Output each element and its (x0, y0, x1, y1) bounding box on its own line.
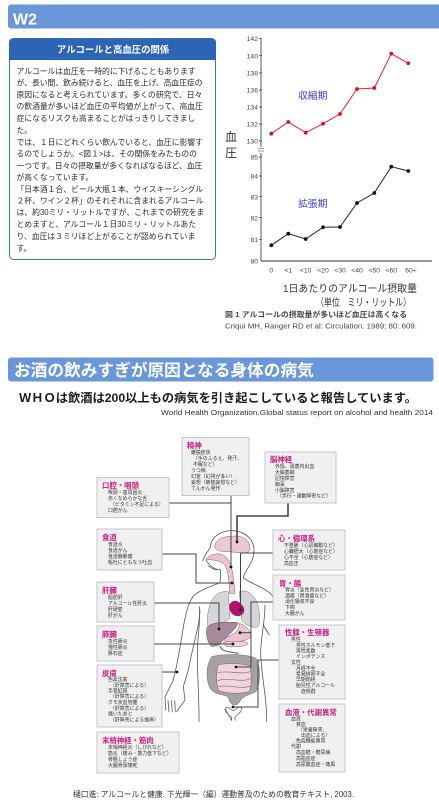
box: cranial nerves: 外傷、頭蓋内出血 (275, 463, 314, 470)
x axis labels: <20 (317, 268, 329, 274)
box: stomach and intestines: 消化吸収不良 (285, 598, 314, 605)
box: esophagus: 食道 (102, 533, 117, 542)
box: oral cavity and pharynx: 喉頭・歯周囲炎 (108, 489, 142, 496)
box: mental (182, 438, 249, 496)
box: esophagus (97, 529, 162, 570)
box: mental: 離脱症状 (191, 449, 211, 456)
box: mental: うつ病 (191, 468, 206, 474)
box: pancreas: 膵石症 (108, 650, 123, 657)
liver (206, 622, 238, 647)
box: pancreas: 急性膵炎 (108, 638, 128, 645)
series: diastolic (black) (269, 165, 410, 247)
box: peripheral nerves and muscle: 大腿骨頭壊死 (108, 762, 137, 769)
box: oral cavity and pharynx (97, 478, 169, 518)
box: mental: 不眠など） (193, 461, 217, 468)
x axis title: （単位 ミリ・リットル） (316, 296, 411, 309)
x axis labels: <40 (351, 268, 363, 274)
panel body text: 一つです。日々の摂取量が多くなればなるほど、血圧 (16, 161, 203, 171)
box: heart and circulation: 不整脈（心房細動など） (284, 542, 338, 549)
box: oral cavity and pharynx: 赤くなめらかな舌 (108, 495, 147, 502)
box: liver: 肝硬変 (108, 606, 123, 613)
box: skin: 掻いたあと (108, 710, 133, 718)
box: oral cavity and pharynx: 口腔・咽頭 (102, 481, 140, 490)
box: mental: 精神 (187, 441, 202, 450)
box: mental: 幻覚（幻視が多い） (191, 473, 235, 480)
x axis title (283, 282, 417, 309)
panel: alcohol and hypertension (9, 38, 216, 260)
panel body text: す。 (16, 244, 31, 253)
box: cranial nerves: 記憶障害 (275, 475, 295, 482)
box: pancreas (97, 626, 154, 661)
box: blood and metabolic disorders (279, 704, 345, 772)
box: oral cavity and pharynx: （ビタミン不足による） (110, 501, 164, 508)
box: blood and metabolic disorders: 血液・代謝異常 (285, 708, 337, 717)
box: blood and metabolic disorders: 血液 (291, 716, 301, 722)
box: oral cavity and pharynx: 口腔がん (108, 507, 128, 514)
box: reproductive organs: 症候群 (301, 688, 316, 695)
box: peripheral nerves and muscle (97, 732, 179, 773)
box: stomach and intestines: 下痢 (285, 605, 295, 611)
panel body text: は、約30ミリ・リットルですが、これまでの研究をま (16, 207, 204, 217)
box: blood and metabolic disorders: 貧血 (296, 721, 306, 728)
x axis labels: 60+ (405, 268, 417, 274)
heading bar: W2 (8, 4, 439, 28)
box: stomach and intestines: 胃・腸 (279, 579, 302, 588)
box: liver (97, 582, 154, 622)
box: peripheral nerves and muscle: 末梢神経・筋肉 (102, 736, 154, 745)
box: heart and circulation: 高血圧 (284, 560, 299, 567)
box: cranial nerves: 小脳障害 (275, 487, 295, 494)
box: stomach and intestines: 大腸がん (285, 610, 305, 617)
small intestine (217, 664, 251, 693)
box: cranial nerves (265, 452, 336, 503)
box: reproductive organs (279, 625, 345, 699)
y axis labels: 130 (247, 139, 258, 146)
heart (230, 601, 244, 616)
WHO statement: ＷＨＯは飲酒は200以上もの病気を引き起こしていると報告しています。 (19, 390, 417, 405)
x axis labels (269, 268, 417, 274)
box: skin: 色素沈着 (108, 676, 128, 683)
box: blood and metabolic disorders: 高尿酸血症・痛風 (296, 761, 335, 768)
y axis labels: 136 (247, 88, 258, 95)
panel body text: た。 (16, 126, 32, 135)
figure caption: Criqui MH, Ranger RD et al: Circulation. 1989; 80: 609. (225, 322, 417, 330)
y axis labels: 82 (250, 215, 258, 222)
box: pancreas: 膵臓 (102, 630, 117, 639)
body diagram (97, 438, 345, 773)
box: reproductive organs: 男性ホルモン低下 (296, 642, 335, 649)
box: liver: 脂肪肝 (108, 594, 123, 601)
box: esophagus: 嘔吐にともなう吐血 (108, 559, 152, 566)
x axis labels: <30 (334, 268, 346, 274)
y axis labels: 132 (247, 122, 258, 129)
panel body text: が、長い間、飲み続けると、血圧を上げ、高血圧症の (16, 78, 203, 88)
box: reproductive organs: 男性素数 (296, 648, 316, 654)
box: skin: （肝障害による） (110, 682, 149, 689)
box: reproductive organs: 性腺・生殖器 (285, 628, 330, 637)
box: esophagus: 食道炎 (108, 541, 123, 548)
box: blood and metabolic disorders: 免疫機能異常 (296, 738, 325, 744)
box: skin (97, 665, 162, 727)
y axis title (225, 130, 237, 160)
series: systolic (red) (269, 52, 410, 136)
panel body text: ２杯、ワイン２杯」のそれぞれに含まれるアルコール (16, 196, 204, 206)
box: esophagus: 食道静脈瘤 (108, 553, 133, 560)
panel body text (16, 66, 204, 253)
box: peripheral nerves and muscle: 骨粗しょう症 (108, 756, 137, 763)
body outline (165, 531, 274, 722)
box: liver: 肝がん (108, 612, 123, 619)
y axis labels: 142 (247, 36, 258, 43)
heading bar: W2: W2 (13, 12, 37, 28)
panel body text: るのでしょうか。<図１>は、その関係をみたものの (16, 149, 197, 159)
box: reproductive organs: 早期閉経 (296, 676, 316, 683)
y axis labels: 83 (250, 194, 258, 201)
y axis labels: 138 (247, 71, 258, 78)
connector lines (154, 495, 288, 707)
large intestine (207, 655, 259, 705)
panel body text: では、１日にどれくらい飲んでいると、血圧に影響す (16, 137, 203, 147)
panel header (9, 38, 216, 60)
box: mental: （手のふるえ、発汗、 (193, 455, 242, 462)
x axis labels: <60 (386, 268, 397, 274)
y axis labels: 81 (250, 237, 258, 244)
panel body text: り、血圧は３ミリほど上がることが認められていま (16, 231, 195, 241)
box: blood and metabolic disorders: 高脂血症 (296, 755, 316, 762)
panel body text: 症になるリスクも高まることがはっきりしてきまし (16, 113, 195, 123)
box: skin: （肝障害による掻痒） (110, 716, 159, 724)
box: heart and circulation: 心・循環系 (278, 534, 316, 543)
panel header: アルコールと高血圧の関係 (57, 44, 170, 55)
y axis title: 圧 (225, 146, 237, 160)
x axis labels: <50 (369, 268, 380, 274)
human body illustration (165, 531, 274, 722)
lungs (207, 591, 260, 630)
box: cranial nerves: 痴呆 (275, 481, 285, 488)
panel body text: 「日本酒１合、ビール大瓶１本、ウイスキーシングル (16, 184, 203, 194)
chart: blood pressure vs alcohol intake (225, 36, 432, 309)
stomach and pancreas (224, 623, 251, 642)
chart axes (258, 38, 432, 261)
box: heart and circulation (273, 530, 345, 570)
box: stomach and intestines: 胃炎（急性胃炎など） (285, 586, 334, 594)
connector dots (176, 541, 242, 708)
box: heart and circulation: 心臓肥大（心筋症など） (284, 548, 338, 555)
figure caption (225, 310, 417, 330)
box: skin: クモ状血管腫 (108, 699, 137, 706)
box: peripheral nerves and muscle: 末梢神経炎（しびれなど） (108, 744, 167, 751)
figure caption: 図 1 アルコールの摂取量が多いほど血圧は高くなる (225, 310, 407, 319)
box: mental: 妄想（嫉妬妄想など） (191, 479, 240, 486)
WHO source: World Health Organization.Global status report on alcohol and health 2014 (161, 408, 433, 417)
y axis title: 血 (225, 130, 237, 144)
panel body text: 原因になると考えられています。多くの研究で、日々 (16, 89, 202, 99)
y axis labels: 140 (247, 53, 258, 60)
box: liver: アルコール性肝炎 (108, 600, 147, 607)
heading bar: diseases caused by excess drinking: お酒の飲みすぎが原因となる身体の病気 (14, 360, 314, 380)
box: esophagus: 食道がん (108, 547, 128, 554)
heading bar: diseases caused by excess drinking (8, 358, 434, 382)
box: pancreas: 慢性膵炎 (108, 644, 128, 651)
panel body text: の飲酒量が多いほど血圧の平均値が上がって、高血圧 (16, 101, 203, 111)
box: heart and circulation: 心不全（心筋症など） (284, 554, 333, 561)
box: reproductive organs: 女性 (291, 659, 301, 666)
x axis labels: 0 (269, 268, 273, 274)
source citation: 樋口進: アルコールと健康. 下光輝一（編）運動普及のための教育テキスト, 2003. (73, 789, 354, 799)
x axis labels: <10 (300, 268, 312, 274)
box: liver: 肝臓 (102, 586, 117, 595)
panel body text: とめますと、アルコール１日30ミリ・リットルあた (16, 220, 196, 229)
y axis labels: 85 (250, 155, 258, 162)
x axis title: 1日あたりのアルコール摂取量 (283, 282, 417, 295)
box: blood and metabolic disorders: 代謝 (291, 743, 301, 750)
panel body text: アルコールは血圧を一時的に下げることもあります (16, 66, 196, 76)
box: blood and metabolic disorders: 高血糖・糖尿病 (296, 749, 330, 756)
box: cranial nerves: （歩行・運動障害など） (277, 492, 331, 500)
box: reproductive organs: 男性 (291, 636, 301, 643)
box: peripheral nerves and muscle: 筋炎（痛み・筋力低下など） (108, 750, 172, 757)
y axis labels (247, 36, 258, 265)
box: stomach and intestines: 潰瘍（胃潰瘍など） (285, 592, 329, 600)
box: mental: てんかん発作 (191, 485, 220, 492)
mouth and throat (206, 554, 235, 593)
y axis labels: 84 (250, 174, 258, 181)
box: cranial nerves: 大脳萎縮 (275, 469, 295, 476)
box: skin: （肝障害による） (110, 705, 149, 712)
panel body text: が高くなっています。 (16, 172, 93, 182)
box: skin: （肝障害による） (110, 693, 149, 700)
box: reproductive organs: 希発排卵不全 (296, 670, 325, 678)
box: reproductive organs: 胎児性アルコール (296, 682, 335, 689)
box: stomach and intestines (273, 575, 345, 620)
box: blood and metabolic disorders: 出血による） (301, 732, 330, 739)
box: skin: 手掌紅斑 (108, 688, 128, 694)
box: cranial nerves: 脳神経 (270, 455, 293, 464)
box: reproductive organs: 月経不全 (296, 665, 316, 672)
box: blood and metabolic disorders: （栄養障害、 (298, 726, 327, 734)
label: diastolic: 拡張期 (298, 197, 328, 210)
x axis labels: <1 (284, 268, 292, 274)
brain (215, 536, 250, 553)
box: skin: 皮膚 (102, 669, 117, 678)
label: systolic: 収縮期 (298, 89, 328, 102)
pelvic organ (225, 707, 242, 721)
y axis labels: 134 (247, 105, 258, 112)
box: reproductive organs: インポテンス (296, 653, 325, 660)
y axis labels: 80 (250, 258, 258, 265)
